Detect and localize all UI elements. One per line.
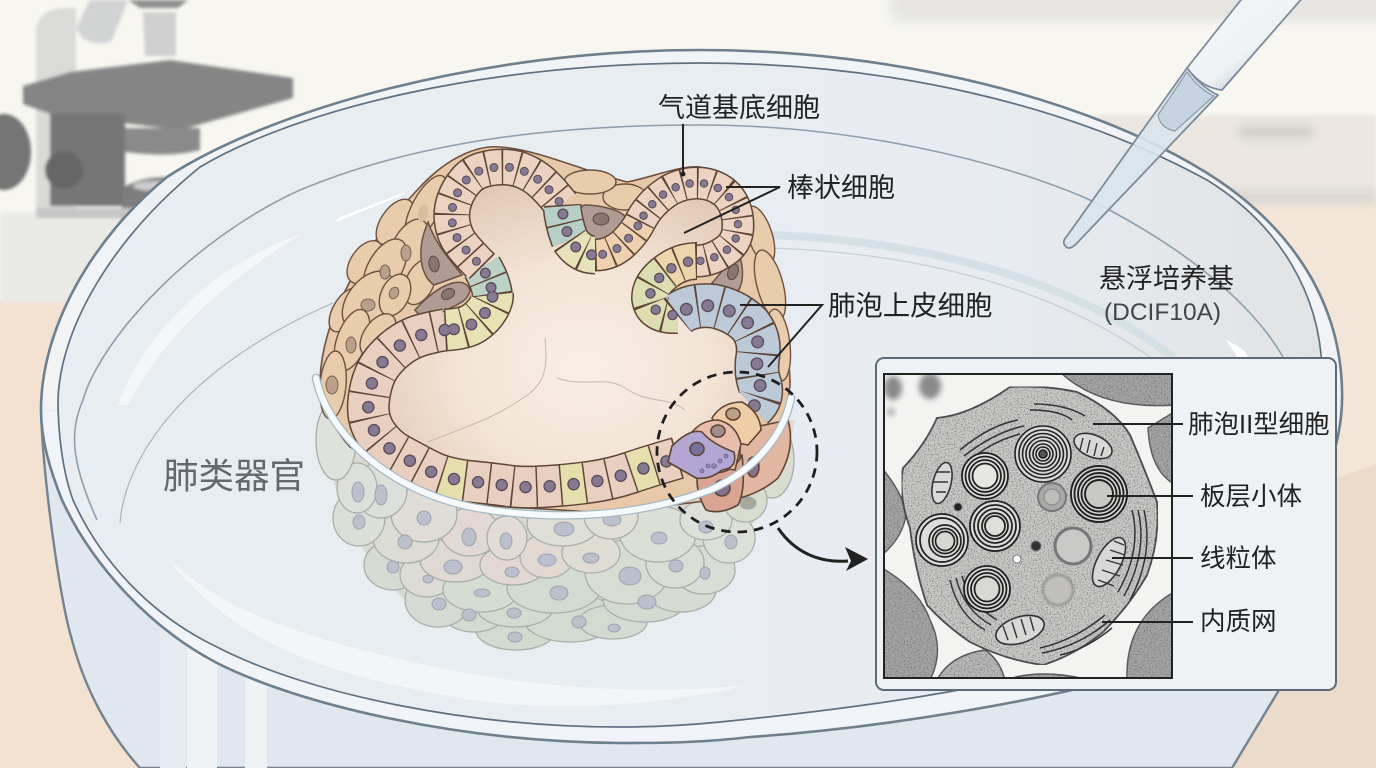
inset label: endoplasmic reticulum: 内质网	[1200, 608, 1277, 636]
alveolar type II cell cluster	[668, 402, 790, 512]
label: suspension medium	[1099, 264, 1234, 326]
pipette barrel	[1187, 0, 1304, 90]
epithelium cell fill	[368, 167, 761, 487]
inset leader lines	[1093, 424, 1193, 622]
mitochondrial cristae	[934, 438, 1125, 640]
zoom circle	[657, 372, 817, 532]
inset label: type II cell: 肺泡II型细胞	[1188, 411, 1330, 439]
inset panel: TEM	[876, 358, 1336, 690]
label: alveolar epithelial cells: 肺泡上皮细胞	[828, 290, 992, 321]
underside nuclei	[352, 448, 779, 642]
yellow basal cells	[368, 330, 678, 487]
epithelium outline	[368, 167, 761, 487]
electron micrograph	[882, 372, 1174, 680]
pipette	[1064, 0, 1304, 248]
dish inner rim	[58, 63, 1322, 727]
medium surface line	[75, 125, 1283, 520]
organoid underside seen through the medium	[316, 400, 795, 650]
dish front wall	[41, 400, 1342, 768]
inset label: mitochondria: 线粒体	[1200, 545, 1277, 573]
label: club cells	[684, 173, 895, 233]
label: suspension medium: (DCIF10A)	[1104, 299, 1221, 326]
inset label: lamellar body: 板层小体	[1200, 483, 1302, 511]
crevice nuclei	[428, 213, 740, 302]
blurred lab shelf	[890, 0, 1376, 202]
blurred microscope	[0, 0, 300, 302]
label: suspension medium: 悬浮培养基	[1099, 264, 1234, 294]
mitochondria	[928, 428, 1132, 650]
dark debris top-left	[884, 373, 941, 416]
neighbouring cells	[882, 372, 1174, 680]
bleb dots on type II cell	[700, 454, 728, 473]
pipette tip shading	[1158, 72, 1214, 131]
label: airway basal cells: 气道基底细胞	[658, 93, 820, 123]
surface reflection lines	[118, 193, 1248, 706]
dish wall highlights	[160, 630, 267, 768]
pipette tip	[1064, 68, 1218, 248]
epithelium cell dividers	[368, 167, 761, 487]
lumen folds	[428, 338, 685, 442]
micrograph border	[884, 374, 1172, 678]
target cell body	[902, 387, 1158, 665]
zoom arrow	[778, 528, 868, 571]
crevice shadows	[415, 205, 742, 322]
endoplasmic reticulum membranes	[950, 404, 1147, 655]
lung organoid	[316, 147, 795, 650]
label: lung organoid: 肺类器官	[163, 456, 305, 496]
lamellar bodies	[916, 426, 1127, 612]
outer tan cells	[317, 170, 794, 420]
label: airway basal cells	[658, 93, 820, 176]
inset panel frame	[876, 358, 1336, 690]
lumen floor	[367, 167, 760, 488]
outer cell nuclei	[326, 203, 430, 394]
label: club cells: 棒状细胞	[787, 173, 895, 203]
epithelium nuclei	[368, 167, 761, 487]
label: alveolar epithelial cells	[740, 290, 992, 367]
organoid outer cell mass	[320, 147, 790, 513]
culture rim arc in front of organoid	[316, 378, 791, 515]
vesicles	[954, 483, 1091, 605]
